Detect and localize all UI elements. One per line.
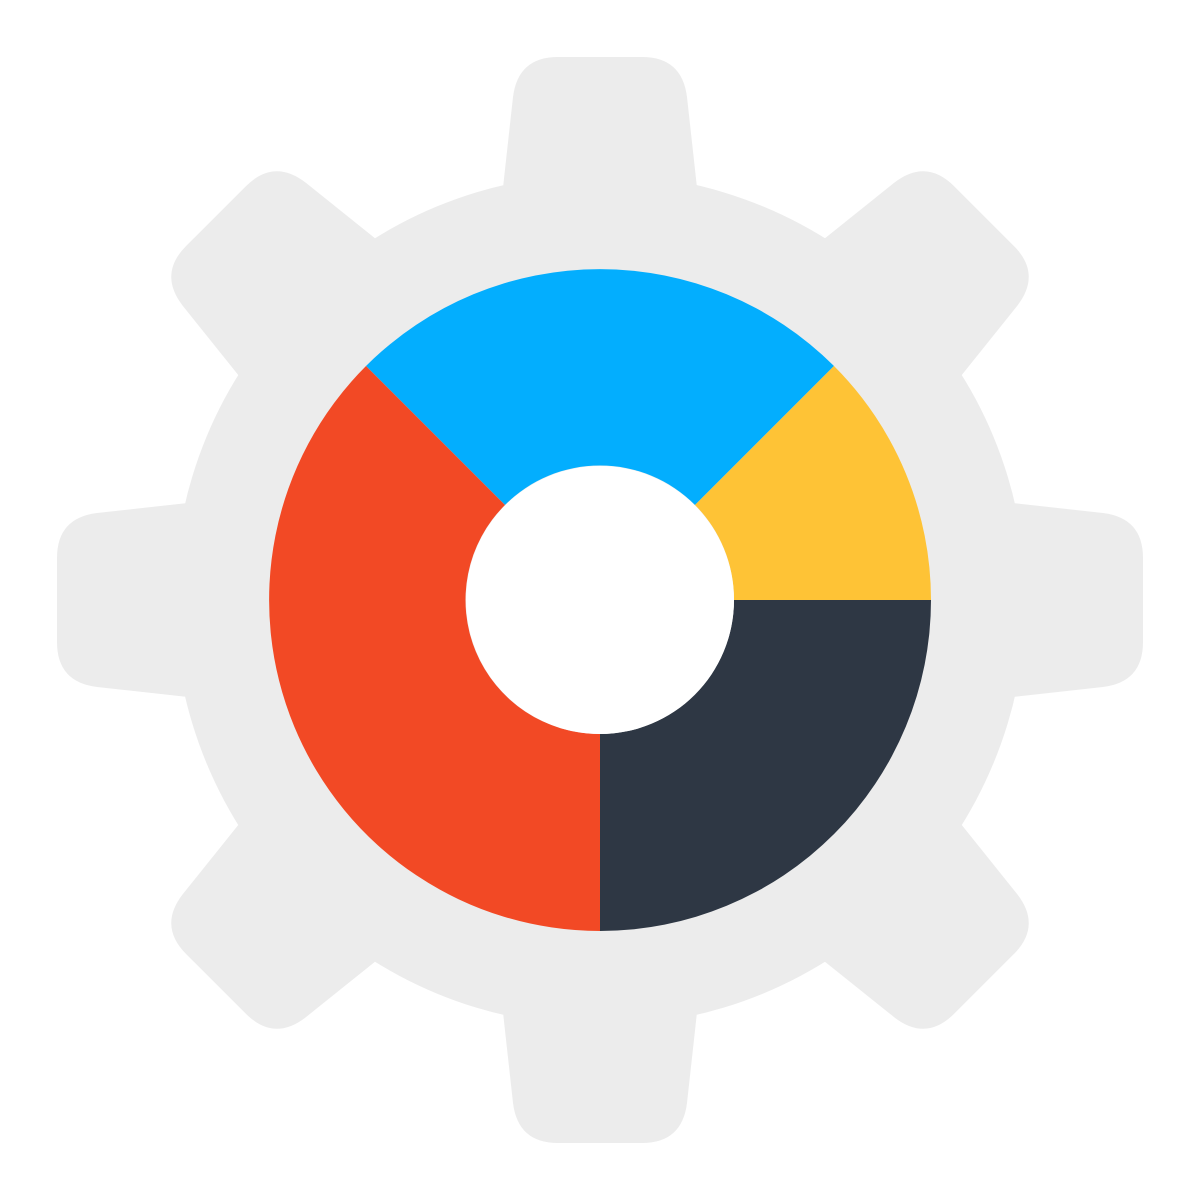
segment: yellow bbox=[695, 366, 931, 600]
donut chart bbox=[269, 269, 931, 931]
segment: red bbox=[269, 366, 600, 931]
center hole bbox=[466, 466, 734, 734]
segment: blue bbox=[366, 269, 834, 505]
segment: dark bbox=[600, 600, 931, 931]
